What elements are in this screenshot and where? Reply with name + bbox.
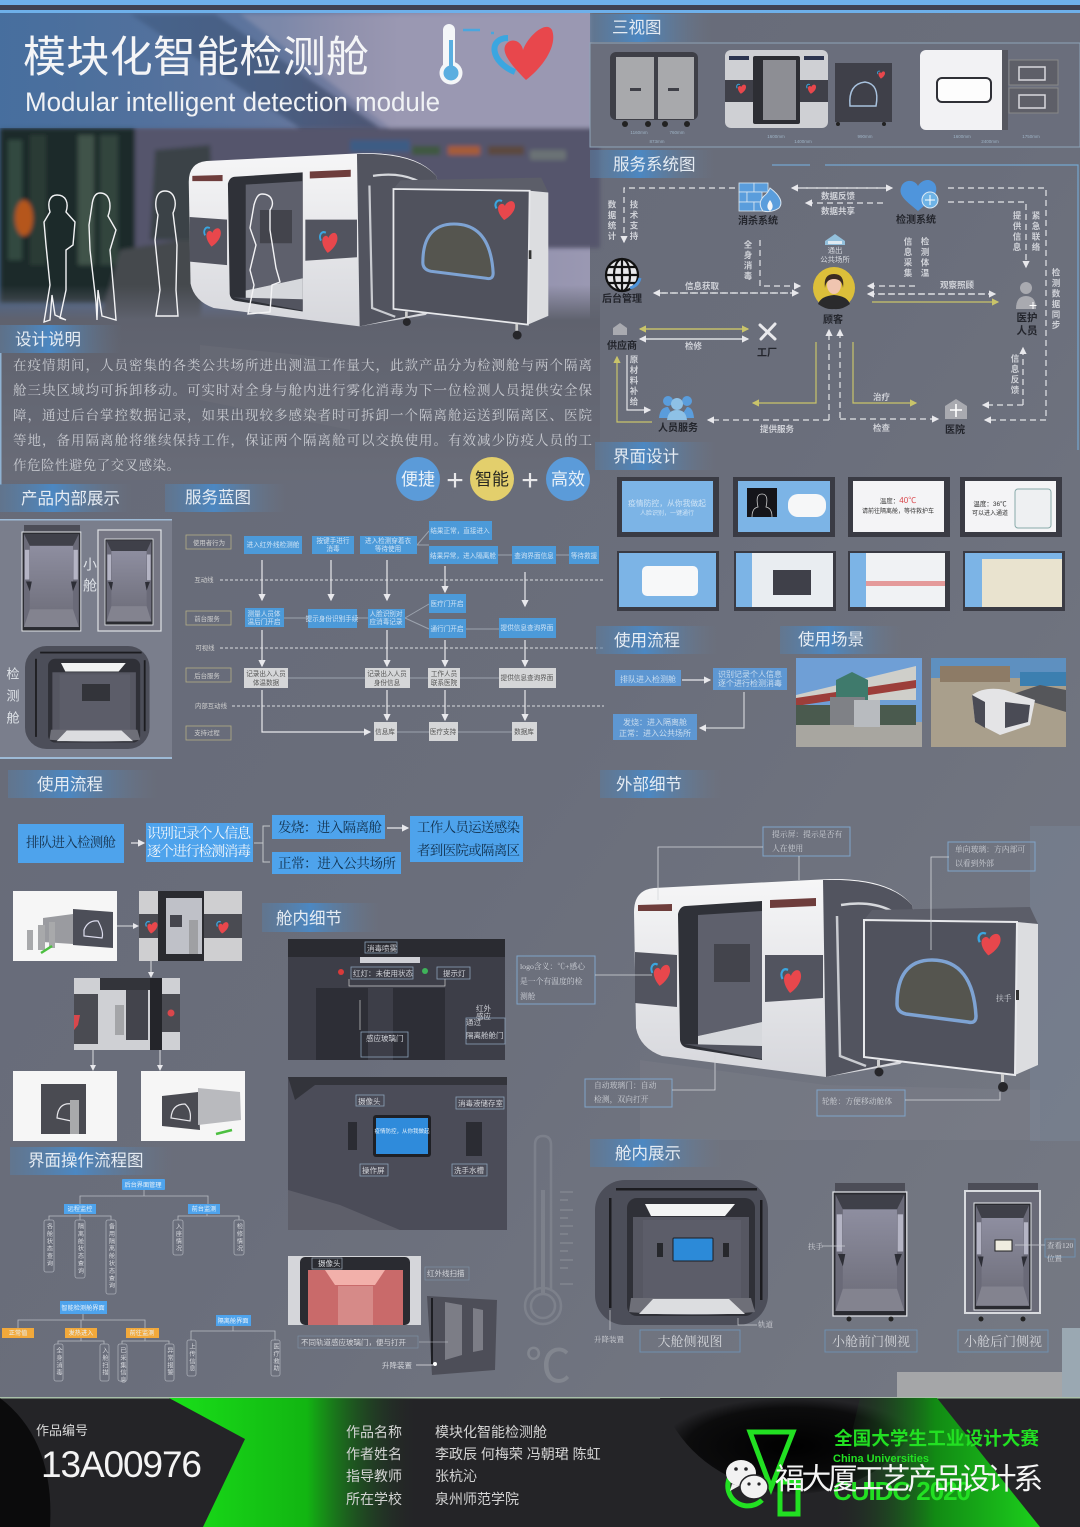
- panel: three views: [590, 43, 1080, 147]
- heading: usage flow small: [596, 626, 718, 654]
- work info: 指导教师: [346, 1468, 402, 1484]
- flow labels: [607, 191, 1061, 434]
- flow labels: 检测体温: [920, 236, 930, 279]
- competition name: 全国大学生工业设计大赛: [834, 1428, 1039, 1449]
- callout labels: 自动玻璃门：自动: [594, 1080, 657, 1090]
- detail photo: ceiling and lights: 消毒喷雾: [367, 943, 397, 953]
- footer left dark arc: [0, 1398, 50, 1527]
- cabin labels: 位置: [1047, 1253, 1062, 1263]
- photo: store scene: [796, 658, 922, 747]
- panel: service blueprint: 通行门开启: [431, 624, 463, 633]
- flow images: [13, 891, 245, 1141]
- yellow and solid flows: [617, 302, 998, 422]
- flow labels: 紧急联络: [1031, 210, 1041, 253]
- detail photo: ceiling and lights: 红外: [476, 1003, 491, 1013]
- label: sliding door: [298, 1336, 448, 1348]
- flow labels: 数据反馈: [821, 191, 856, 201]
- panel: service blueprint: 人脸识别对: [370, 609, 403, 618]
- badges: convenient + smart + efficient: 便捷: [401, 470, 435, 489]
- interface operation tree: 各舱状态查询: [46, 1222, 53, 1267]
- small cabin front view: [833, 1183, 907, 1322]
- cabin labels: 小舱前门侧视: [832, 1334, 910, 1349]
- heading: cabin display: 舱内展示: [615, 1144, 681, 1163]
- icon: hospital: [945, 399, 967, 419]
- capsule reflection on floor: [200, 345, 350, 430]
- panel: service blueprint: 后台服务: [194, 671, 220, 680]
- design description text: 在疫情期间，人员密集的各类公共场所进出测温工作量大，此款产品分为检测舱与两个隔离: [13, 357, 592, 374]
- dimensions: 1600mm: [767, 134, 785, 139]
- interface operation tree: 远程监控: [68, 1205, 92, 1213]
- badges: convenient + smart + efficient: +: [521, 464, 539, 497]
- footer band: [0, 1397, 1080, 1527]
- heading: interior display: 产品内部展示: [21, 489, 120, 508]
- flow labels: 提供服务: [760, 424, 795, 434]
- callout labels: 单向玻璃：方内部可: [955, 844, 1025, 854]
- interface operation tree: 已采集信息: [119, 1347, 126, 1384]
- detail photo: ceiling and lights: 隔离舱舱门: [466, 1030, 504, 1040]
- panel: service blueprint: 进入红外线检测舱: [247, 540, 300, 549]
- heading: cabin display: [590, 1139, 722, 1167]
- interface operation tree: 智能检测舱界面: [61, 1304, 105, 1312]
- icon: wechat: [726, 1460, 768, 1499]
- label: lift device: [382, 1360, 433, 1370]
- usage flow large: 排队进入检测舱: [26, 834, 116, 850]
- heading: service system: [590, 150, 715, 178]
- exterior large capsule render: [634, 879, 1040, 1140]
- interface operation tree: 全身消毒: [55, 1346, 62, 1377]
- heading: exterior details: [600, 770, 722, 798]
- heading: three views: [590, 14, 712, 42]
- detail photo: ceiling and lights: 红灯：未使用状态: [353, 968, 413, 978]
- dimensions: 1160mm: [630, 130, 648, 135]
- label: infrared scan: 红外线扫描: [427, 1268, 465, 1278]
- dimensions: 1750mm: [1022, 134, 1040, 139]
- panel: service blueprint: 查询界面信息: [514, 551, 554, 560]
- footer green wedge: [169, 1398, 420, 1527]
- small cabin rear view: [965, 1183, 1040, 1322]
- panel: service blueprint: 温后门开启: [248, 617, 280, 626]
- label: medical staff: 人员: [1016, 325, 1038, 337]
- icon: customer: [813, 267, 855, 309]
- panel: service blueprint: 支持过程: [194, 728, 220, 737]
- heading: interface flow: 界面操作流程图: [28, 1151, 144, 1170]
- heading: interface design: 界面设计: [613, 447, 679, 466]
- icon: disinfection system: [739, 183, 781, 212]
- small usage flow: 发烧：进入隔离舱: [623, 717, 687, 727]
- interface operation tree: 备用隔离舱状态查询: [108, 1222, 115, 1290]
- heading: interior display: [0, 484, 132, 512]
- flow labels: 治疗: [873, 392, 891, 402]
- panel: interface screens: 请前往隔离舱，等待救护车: [862, 507, 934, 515]
- callout leader lines: [595, 847, 1000, 1100]
- callout labels: 以看到外部: [955, 858, 994, 868]
- footer right shapes: [660, 1398, 925, 1495]
- screen bezels: [617, 477, 1065, 611]
- usage flow large: 者到医院或隔离区: [417, 842, 520, 858]
- flow labels: 信息获取: [685, 281, 720, 291]
- badges: convenient + smart + efficient: 高效: [551, 470, 585, 489]
- panel: service blueprint: 按键手进行: [317, 536, 350, 545]
- panel: service blueprint: 医疗门开启: [431, 599, 463, 608]
- white dashed flows: [624, 188, 1046, 420]
- work number: [36, 1423, 202, 1485]
- blueprint dashed lines: [220, 580, 604, 706]
- label: medical staff: 医护: [1016, 311, 1038, 324]
- detail photo: ceiling and lights: 感应: [476, 1011, 491, 1021]
- heading: service blueprint: 服务蓝图: [185, 488, 251, 507]
- flow arrows: [93, 926, 160, 1070]
- badges: convenient + smart + efficient: [396, 457, 590, 501]
- label: exit to public: [820, 246, 850, 264]
- panel: product interior: [0, 519, 172, 759]
- decorative thermometer: [525, 1136, 573, 1324]
- labels: detection cabin: 检测舱: [4, 667, 20, 733]
- panel: service blueprint: 进入检测穿着衣: [365, 536, 411, 545]
- icon: detection system heart: [900, 180, 938, 211]
- flow labels: 提供信息: [1012, 210, 1022, 253]
- panel: service blueprint: 身份信息: [374, 678, 401, 687]
- heading: usage flow: 使用流程: [37, 775, 103, 794]
- panel: service blueprint: 联系医院: [431, 678, 458, 687]
- work info: 李政辰 何梅荣 冯朝珺 陈虹: [435, 1446, 601, 1462]
- detail photo: infrared scan: [288, 1256, 421, 1325]
- label: customer: 顾客: [823, 313, 843, 326]
- callout labels: 是一个有温度的检: [520, 976, 583, 986]
- callout labels: 轮舱：方便移动舱体: [822, 1096, 892, 1106]
- step 2 image: [139, 891, 242, 961]
- celsius mark: ℃: [525, 1340, 571, 1392]
- light corner patch: [897, 1328, 1080, 1398]
- label: supplier: 供应商: [607, 339, 637, 352]
- label: staff service: 人员服务: [658, 421, 698, 434]
- label: sliding door: 不同轨道感应玻璃门，便与打开: [301, 1337, 406, 1347]
- detail photo: screen wall: [288, 1077, 507, 1230]
- interface operation tree: 上传信息: [188, 1342, 195, 1373]
- cabin labels: 小舱后门侧视: [964, 1334, 1042, 1349]
- work info: 模块化智能检测舱: [435, 1424, 547, 1440]
- flow labels: 信息采集: [903, 236, 913, 279]
- panel: service blueprint: 医疗支持: [430, 727, 457, 736]
- cabin labels: [594, 1239, 1075, 1352]
- badges: convenient + smart + efficient: +: [446, 464, 464, 497]
- heading: exterior details: 外部细节: [616, 775, 682, 794]
- icon: supplier: [613, 323, 627, 335]
- heading: service blueprint: [165, 484, 287, 512]
- panel: service blueprint: 等待使用: [375, 544, 401, 553]
- large cabin view: [595, 1180, 768, 1325]
- heading: service system: 服务系统图: [613, 155, 696, 174]
- panel: interface screens: 疫情防控，从你我做起: [628, 498, 706, 508]
- panel: service blueprint: 前台服务: [194, 614, 220, 623]
- icon: heart logo: [494, 27, 553, 80]
- blueprint blue boxes: [244, 521, 599, 638]
- flow labels: 数据统计: [607, 199, 617, 242]
- usage flow large: 发烧：进入隔离舱: [278, 819, 382, 835]
- step 3 image: [74, 978, 180, 1050]
- interface operation tree: 医疗救助: [272, 1343, 279, 1373]
- badges: convenient + smart + efficient: 智能: [475, 470, 509, 489]
- callout labels: 提示屏：提示是否有: [772, 829, 842, 839]
- work info: 作品名称: [346, 1424, 402, 1440]
- interface operation tree: 发热进入: [69, 1329, 93, 1337]
- interface operation tree: 入座情况: [174, 1223, 182, 1253]
- heading: usage flow small: 使用流程: [614, 631, 680, 650]
- label: exit to public: 通出: [828, 246, 842, 255]
- service system diagram: [602, 165, 1078, 450]
- flow labels: 检修: [685, 341, 703, 351]
- blueprint grey boxes: [244, 668, 556, 741]
- callout labels: 测舱: [520, 991, 536, 1001]
- icon: thermometer: [440, 24, 494, 84]
- small cabin front: [22, 525, 81, 631]
- usage flow large: [18, 815, 523, 874]
- interface operation tree: [2, 1179, 280, 1384]
- cabin labels: 查看120: [1047, 1240, 1073, 1250]
- exterior backdrop strip: [1030, 826, 1080, 1141]
- cabin labels: 扶手: [808, 1241, 823, 1251]
- small usage flow: 逐个进行检测消毒: [718, 678, 782, 688]
- design description text: 障，通过后台掌控数据记录，如果出现较多感染者时可拆卸一个隔离舱运送到隔离区、医院: [13, 407, 592, 424]
- label: exit to public: 公共场所: [820, 255, 850, 264]
- detail photo: screen wall: 洗手水槽: [454, 1165, 484, 1175]
- design description text: 作危险性避免了交叉感染。: [13, 457, 180, 473]
- panel: interface screens: 人脸识别，一键通行: [640, 509, 694, 517]
- icon: public place: [825, 234, 845, 245]
- panel: service blueprint: 等待救援: [571, 551, 598, 560]
- step 1 image: [13, 891, 117, 961]
- view: top: [920, 50, 1058, 130]
- label: hospital: 医院: [945, 423, 965, 436]
- callout labels: 扶手: [996, 993, 1012, 1003]
- callout labels: 人在使用: [772, 843, 803, 853]
- cabin labels: 升降装置: [594, 1334, 624, 1344]
- panel: service blueprint: 可视线: [195, 643, 215, 652]
- panel: service blueprint: 工作人员: [431, 669, 458, 678]
- title: 模块化智能检测舱: [23, 34, 369, 82]
- icon: backend globe: [606, 259, 640, 291]
- heading: three views: 三视图: [612, 18, 662, 37]
- usage flow large: 工作人员运送感染: [417, 819, 520, 835]
- panel: service blueprint: 提供信息查询界面: [501, 623, 554, 632]
- detail photo: screen wall: 摄像头: [358, 1096, 381, 1106]
- panel: service blueprint: 内部互动线: [195, 701, 228, 710]
- detail photo: ceiling and lights: 通过: [466, 1017, 481, 1027]
- detail photo: screen wall: 消毒液储存室: [458, 1098, 503, 1108]
- flow labels: 观察照顾: [940, 280, 975, 290]
- usage flow large: 正常：进入公共场所: [278, 855, 396, 871]
- cabin labels: 大舱侧视图: [657, 1334, 723, 1349]
- small usage flow: [613, 668, 787, 740]
- view: front with pod: [725, 50, 892, 128]
- big cabin: [25, 646, 150, 749]
- competition logo: [728, 1432, 798, 1514]
- dimensions: 1400mm: [794, 139, 812, 144]
- interface operation tree: 后台界面管理: [124, 1181, 162, 1189]
- hero photo background: [0, 13, 600, 480]
- label: backend: 后台管理: [602, 292, 642, 305]
- icon: staff group: [659, 396, 694, 420]
- flow labels: 技术支持: [629, 199, 639, 242]
- flow labels: 全身消毒: [743, 239, 753, 282]
- panel: service blueprint: 信息库: [375, 727, 395, 736]
- design description text: 等地，备用隔离舱将继续保持工作，保证两个隔离舱可以交换使用。有效减少防疫人员的工: [13, 432, 592, 449]
- panel: service blueprint: 互动线: [194, 575, 214, 584]
- flow labels: 检测数据同步: [1051, 267, 1061, 331]
- work info: 张杭沁: [435, 1468, 477, 1484]
- panel: interface screens: [617, 477, 1065, 611]
- dimensions: 760mm: [669, 130, 685, 135]
- watermark text: 福大厦工艺产品设计系: [775, 1463, 1043, 1496]
- work info: 泉州师范学院: [435, 1491, 519, 1507]
- people outlines: [44, 191, 280, 322]
- detail photo: screen wall: 疫情防控，从你我做起: [374, 1127, 430, 1135]
- label: medical staff: [1016, 311, 1038, 337]
- detail photo: ceiling and lights: [288, 939, 505, 1060]
- step 4 image: [13, 1071, 117, 1141]
- top blue rule: [0, 0, 1080, 13]
- panel: service blueprint: 消毒: [326, 544, 340, 553]
- work number: 作品编号: [36, 1423, 88, 1438]
- small usage flow: 识别记录个人信息: [718, 669, 782, 679]
- subtitle: Modular intelligent detection module: [25, 87, 440, 117]
- label: disinfection system: 消杀系统: [738, 214, 778, 227]
- heading: usage flow: [8, 770, 158, 798]
- step 5 image: [141, 1071, 245, 1141]
- panel: service blueprint: 记录出入人员: [246, 669, 286, 678]
- callout labels: logo含义：℃+感心: [520, 961, 586, 971]
- detail photo: infrared scan: 摄像头: [318, 1258, 341, 1268]
- detail photo: screen wall: 操作屏: [362, 1165, 385, 1175]
- heading: design notes: [0, 325, 122, 353]
- competition name: [833, 1428, 1039, 1506]
- detail photo: ceiling and lights: 提示灯: [443, 968, 466, 978]
- interface operation tree: 检修情况: [236, 1222, 243, 1253]
- dimensions: 2400mm: [981, 139, 999, 144]
- interface operation tree: 隔离舱界面: [218, 1317, 248, 1325]
- blueprint row labels: [186, 535, 231, 740]
- labels: small cabin: 小舱: [82, 557, 98, 599]
- panel: service blueprint: 使用者行为: [193, 538, 225, 547]
- heading: design notes: 设计说明: [15, 330, 81, 349]
- label: infrared scan: [425, 1267, 469, 1280]
- design description text: 舱三块区域均可拆卸移动。可实时对全身与舱内进行雾化消毒为下一位检测人员提供安全保: [13, 382, 592, 398]
- detail photo: ceiling and lights: 感应玻璃门: [366, 1033, 404, 1043]
- usage flow large: 逐个进行检测消毒: [147, 843, 251, 860]
- heading: cabin details: 舱内细节: [276, 909, 342, 928]
- dimensions: 873mm: [649, 139, 665, 144]
- panel: service blueprint: 提供信息查询界面: [501, 673, 554, 682]
- interface operation tree: 隔离舱状态查询: [76, 1222, 84, 1275]
- competition name: China Universities: [833, 1453, 929, 1465]
- blueprint connectors: [284, 531, 569, 732]
- work info: [346, 1424, 601, 1507]
- panel: service blueprint: 体温数据: [253, 678, 280, 687]
- heading: interface flow: [10, 1147, 174, 1175]
- interface operation tree: 异常报警: [166, 1347, 173, 1377]
- design description text: [0, 353, 592, 485]
- dimensions: 1600mm: [953, 134, 971, 139]
- panel: interface screens: 温度：36℃: [973, 499, 1007, 508]
- usage flow large: 识别记录个人信息: [147, 825, 252, 842]
- flow labels: 信息反馈: [1010, 353, 1020, 396]
- small usage flow: 排队进入检测舱: [620, 674, 676, 684]
- panel: service blueprint: 提示身份识别手续: [306, 614, 359, 623]
- panel: service blueprint: 应消毒记录: [370, 617, 403, 626]
- interface operation tree: 前往监测: [130, 1329, 154, 1337]
- panel: service blueprint: 结果异常，进入隔离舱: [430, 551, 496, 560]
- cabin labels: 轨道: [758, 1319, 773, 1329]
- exterior callouts: [517, 827, 1035, 1116]
- interface operation tree: 入舱扫描: [101, 1347, 108, 1377]
- label: factory: 工厂: [757, 347, 777, 359]
- panel: interface screens: 可以进入通道: [972, 509, 1008, 517]
- hero capsule render: [189, 153, 548, 340]
- heading: interface design: [595, 442, 717, 470]
- callout labels: [520, 829, 1025, 1106]
- work info: 作者姓名: [346, 1446, 402, 1462]
- label: lift device: 升降装置: [382, 1360, 412, 1370]
- flow labels: 数据共享: [821, 206, 856, 216]
- icon: medical staff: [1016, 282, 1036, 309]
- interface operation tree: 前台监测: [192, 1205, 216, 1213]
- heading: usage scenes: 使用场景: [798, 630, 864, 649]
- dimensions: 990mm: [857, 134, 873, 139]
- flow labels: 检查: [873, 423, 891, 433]
- callout labels: 检测，双向打开: [594, 1094, 649, 1105]
- dimensions: [630, 130, 1040, 144]
- icon: factory tools: [760, 324, 775, 339]
- heading: usage scenes: [780, 626, 902, 654]
- panel: service blueprint: 结果正常，直接进入: [430, 526, 490, 535]
- view: back: [610, 52, 698, 127]
- flow labels: 原材料补给: [629, 355, 639, 408]
- panel: service blueprint: 测量人员体: [248, 609, 281, 618]
- panel: service blueprint: 记录出入人员: [367, 669, 407, 678]
- photo: seaside scene: [931, 658, 1066, 747]
- small cabin back: [98, 530, 161, 631]
- competition name: CUIDC 2020: [833, 1476, 971, 1506]
- work number: 13A00976: [41, 1444, 202, 1485]
- small usage flow: 正常：进入公共场所: [619, 728, 691, 738]
- work info: 所在学校: [346, 1491, 402, 1507]
- door render: [427, 1296, 497, 1375]
- panel: interface screens: 温度：40℃: [880, 496, 916, 505]
- interface operation tree: 正常值: [9, 1329, 27, 1337]
- panel: service blueprint: 数据库: [514, 727, 534, 736]
- panel: service blueprint: [186, 521, 604, 741]
- heading: cabin details: [262, 903, 382, 932]
- label: detection system: 检测系统: [896, 213, 936, 226]
